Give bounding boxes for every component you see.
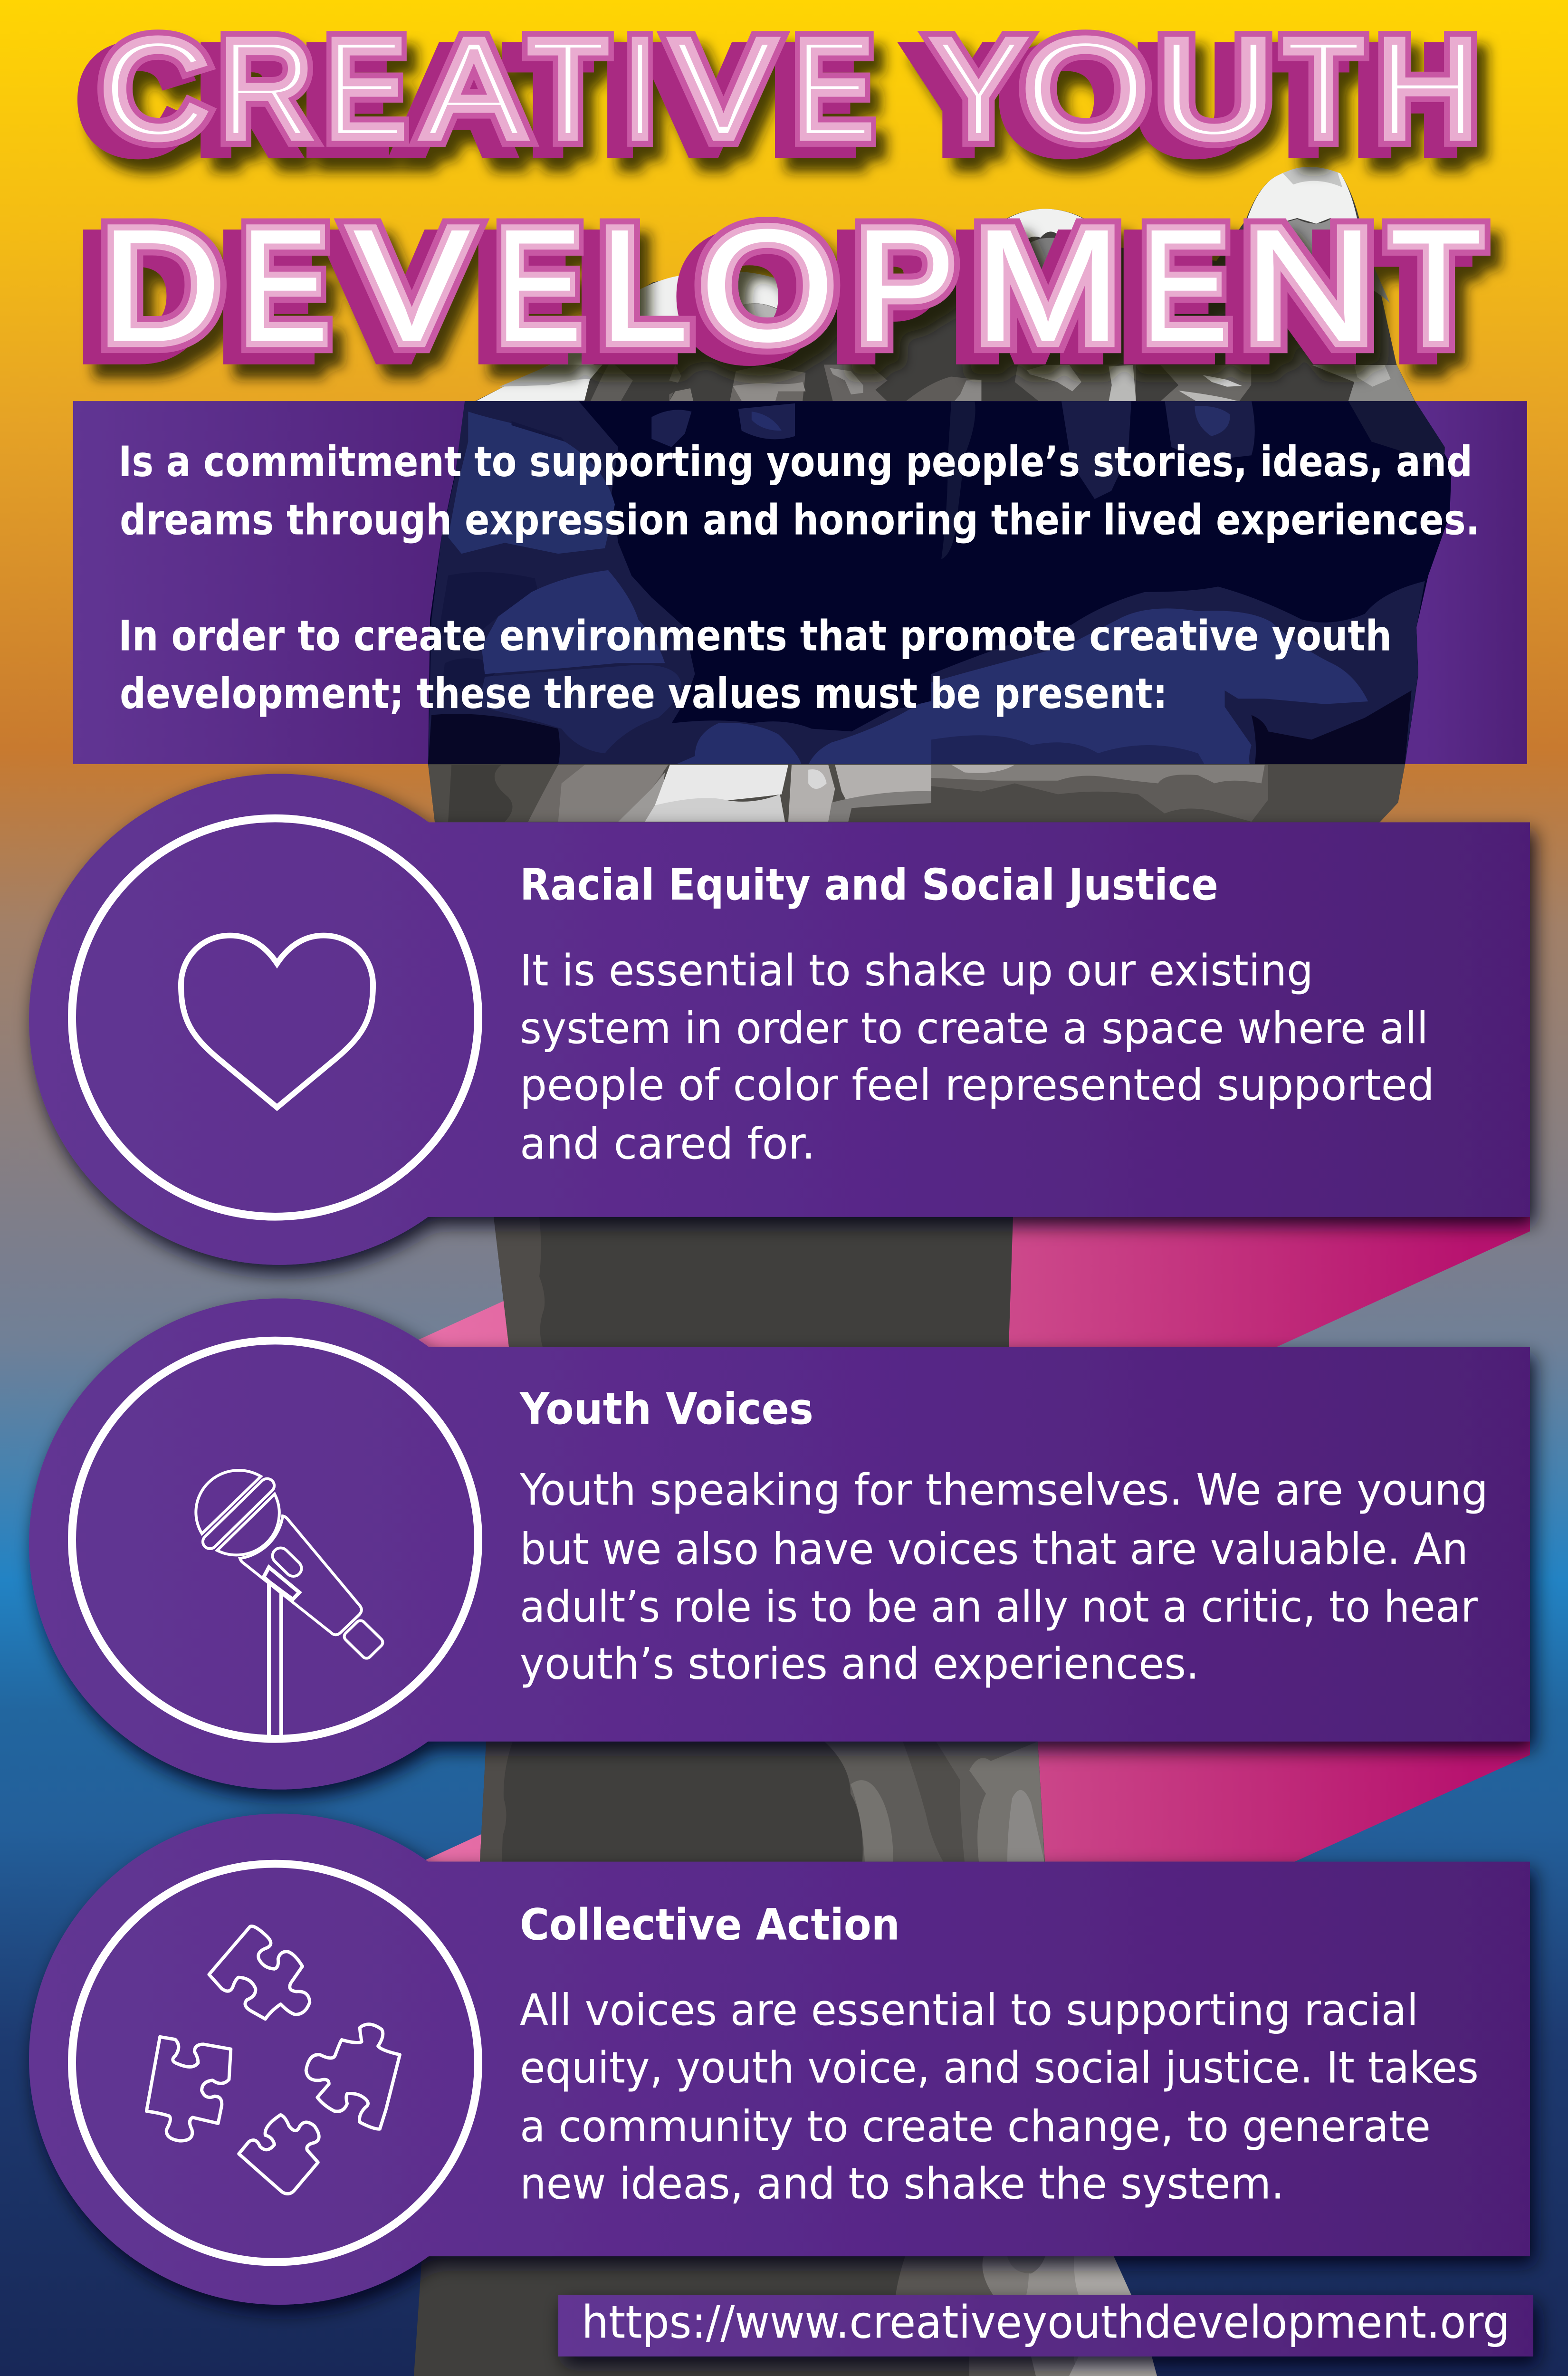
panel text: Racial Equity and Social Justice: and cared for.	[520, 1119, 815, 1169]
card 3 backing	[29, 1814, 1530, 2305]
title line 1 back layer: O	[1003, 21, 1128, 178]
title line 1 middle layer: C	[100, 10, 209, 167]
panel text: Youth Voices: Youth Voices	[519, 1384, 813, 1434]
title line 2 back layer: V	[335, 207, 453, 385]
title line 1 front layer: O	[1023, 10, 1148, 167]
wrist strip between first and second card	[494, 1217, 545, 1347]
title line 1 middle layer: I	[625, 10, 655, 167]
pink arrow band upper	[418, 834, 1530, 1347]
title line 2 middle layer: T	[1390, 196, 1482, 374]
panel text: Youth Voices	[519, 1384, 1488, 1689]
title line 1 front layer: T	[1284, 10, 1363, 167]
panel text: Youth Voices: Youth speaking for themselves. We are young	[519, 1465, 1488, 1515]
title line 1 back layer: T	[1264, 21, 1343, 178]
pink arrow band lower	[426, 1351, 1530, 1862]
title line 1 middle layer: Y	[932, 10, 1025, 167]
title line 1 front layer: I	[625, 10, 655, 167]
title line 2 light layer: L	[599, 196, 688, 374]
raised fist illustration	[414, 167, 1452, 2376]
title line 1 middle layer: T	[528, 10, 608, 167]
fist tones below the panel, right half	[931, 765, 1405, 822]
title line 1 back layer: E	[305, 21, 386, 178]
left half of fist tones	[428, 401, 941, 765]
title line 2 front layer: L	[599, 196, 688, 374]
title line 2 light layer: O	[700, 196, 835, 374]
puzzle piece right	[306, 2024, 400, 2129]
title line 1 front layer: Y	[932, 10, 1025, 167]
panel text: Collective Action	[520, 1899, 1479, 2209]
title line 2 front layer: E	[496, 196, 582, 374]
panel text: Racial Equity and Social Justice: people of color feel represented supported	[520, 1060, 1434, 1110]
title line 1 front layer: T	[528, 10, 608, 167]
middle knuckle highlight	[974, 209, 1117, 261]
title line 1 front layer: U	[1157, 10, 1273, 167]
title line 1 middle layer: T	[1284, 10, 1363, 167]
title line 1 middle layer: E	[794, 10, 873, 167]
panel text: Youth Voices: adult’s role is to be an ally not a critic, to hear	[520, 1582, 1478, 1632]
puzzle piece bottom	[239, 2115, 319, 2194]
title line 2 light layer: P	[855, 196, 956, 374]
wrist texture between second and third card	[480, 1742, 1045, 1862]
title line 1 front layer: V	[672, 10, 776, 167]
title line 2 front layer: D	[101, 196, 221, 374]
title line 2 middle layer: L	[599, 196, 688, 374]
title line 2 middle layer: D	[101, 196, 221, 374]
title line 1 back layer: A	[403, 21, 505, 178]
title line 2 back layer: N	[1225, 207, 1357, 385]
title line 2 front layer: N	[1243, 196, 1375, 374]
title line 1 front layer: A	[423, 10, 525, 167]
title line 2 middle layer: V	[354, 196, 471, 374]
icon: puzzle pieces in ring	[72, 1864, 478, 2262]
title line 1 middle layer: H	[1377, 10, 1479, 167]
title line 2 back layer: T	[1372, 207, 1464, 385]
title line 1 middle layer: E	[325, 10, 406, 167]
title line 1 back layer: I	[605, 21, 635, 178]
title line 1 middle layer: U	[1157, 10, 1273, 167]
icon: microphone in ring	[72, 1341, 478, 1739]
title line 2 front layer: M	[974, 196, 1122, 374]
left knuckle highlight	[475, 271, 791, 402]
panel: introduction	[73, 401, 1527, 765]
title line 1 front layer: C	[100, 10, 209, 167]
title line 1 middle layer: V	[672, 10, 776, 167]
title line 1 middle layer: O	[1023, 10, 1148, 167]
title line 2 back layer: E	[478, 207, 564, 385]
panel text: Racial Equity and Social Justice: system in order to create a space where all	[520, 1003, 1428, 1054]
title line 2 front layer: E	[241, 196, 328, 374]
cards and circles backing	[29, 774, 1533, 2357]
title line 1 middle layer: A	[423, 10, 525, 167]
title line 2 middle layer: P	[855, 196, 956, 374]
title line 1 front layer: H	[1377, 10, 1479, 167]
title line 1 front layer: E	[794, 10, 873, 167]
intro text	[118, 438, 1480, 719]
title line 2 light layer: N	[1243, 196, 1375, 374]
fist seen through the panel	[428, 401, 1452, 765]
title line 2 front layer: P	[855, 196, 956, 374]
title: Creative Youth	[80, 10, 1479, 178]
title line 2 light layer: D	[101, 196, 221, 374]
website link: https://www.creativeyouthdevelopment.org	[582, 2297, 1510, 2348]
title line 2 back layer: E	[223, 207, 310, 385]
title line 2 light layer: M	[974, 196, 1122, 374]
website box backing	[558, 2295, 1533, 2357]
wrist texture at the bottom	[896, 2256, 1157, 2376]
title line 1 back layer: R	[199, 21, 294, 178]
panel text: Racial Equity and Social Justice	[520, 860, 1434, 1169]
title line 2 back layer: D	[83, 207, 203, 385]
intro text: development; these three values must be present:	[120, 670, 1167, 719]
panel text: Racial Equity and Social Justice: Racial Equity and Social Justice	[520, 860, 1218, 910]
title line 1 front layer: R	[219, 10, 314, 167]
panel text: Collective Action: Collective Action	[520, 1899, 900, 1950]
title line 1 back layer: U	[1137, 21, 1253, 178]
icon: heart in ring	[72, 818, 478, 1217]
title line 2 light layer: T	[1390, 196, 1482, 374]
fist tones between title and panel	[499, 364, 1415, 402]
title line 2 back layer: P	[837, 207, 938, 385]
title line 2 middle layer: E	[241, 196, 328, 374]
intro text: In order to create environments that promote creative youth	[118, 612, 1392, 661]
title line 1 back layer: C	[80, 21, 189, 178]
title line 1 back layer: H	[1357, 21, 1459, 178]
fist tones below the panel, left half	[428, 765, 941, 822]
title line 2 front layer: O	[700, 196, 835, 374]
puzzle piece top	[209, 1926, 310, 2019]
panel text: Collective Action: new ideas, and to shake the system.	[520, 2158, 1284, 2209]
title line 2 middle layer: E	[1141, 196, 1228, 374]
title line 1 back layer: T	[508, 21, 588, 178]
index finger highlight	[1247, 167, 1360, 233]
title line 2 back layer: M	[956, 207, 1104, 385]
title line 1 middle layer: R	[219, 10, 314, 167]
panel text: Collective Action: equity, youth voice, and social justice. It takes	[520, 2042, 1479, 2093]
title line 1 back layer: E	[774, 21, 853, 178]
title line 2 front layer: V	[354, 196, 471, 374]
title line 2 middle layer: M	[974, 196, 1122, 374]
panel text: Racial Equity and Social Justice: It is essential to shake up our existing	[520, 945, 1313, 996]
title line 2 back layer: O	[682, 207, 817, 385]
panel text: Youth Voices: youth’s stories and experiences.	[520, 1638, 1199, 1689]
right half of fist tones	[931, 401, 1445, 765]
title line 2 middle layer: E	[496, 196, 582, 374]
card 1 backing	[29, 774, 1530, 1265]
title: Development	[83, 196, 1482, 385]
title line 2 light layer: E	[241, 196, 328, 374]
title line 2 light layer: E	[1141, 196, 1228, 374]
panel text: Collective Action: All voices are essential to supporting racial	[520, 1985, 1418, 2035]
title line 2 light layer: V	[354, 196, 471, 374]
panel text: Youth Voices: but we also have voices that are valuable. An	[520, 1524, 1468, 1574]
title line 2 middle layer: N	[1243, 196, 1375, 374]
title line 2 front layer: T	[1390, 196, 1482, 374]
title line 2 back layer: E	[1123, 207, 1210, 385]
title line 2 middle layer: O	[700, 196, 835, 374]
panel text: Collective Action: a community to create change, to generate	[520, 2101, 1431, 2152]
title line 1 front layer: E	[325, 10, 406, 167]
card 2 backing	[29, 1298, 1530, 1790]
title line 1 back layer: Y	[912, 21, 1005, 178]
title line 2 light layer: E	[496, 196, 582, 374]
title line 1 back layer: V	[652, 21, 756, 178]
title line 2 front layer: E	[1141, 196, 1228, 374]
puzzle piece left	[146, 2037, 231, 2141]
title line 2 back layer: L	[581, 207, 670, 385]
